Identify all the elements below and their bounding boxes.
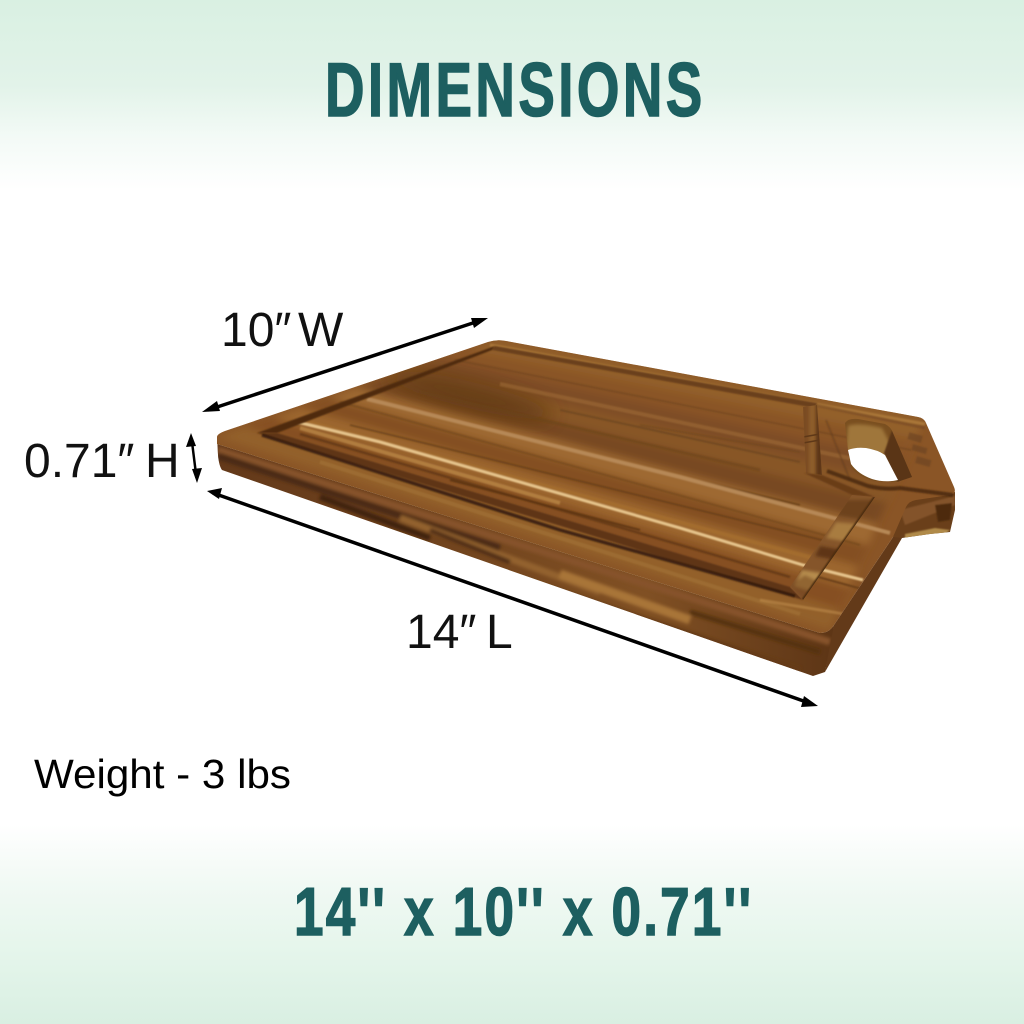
handle dark band [827, 471, 953, 495]
handle opening [845, 419, 912, 482]
label: width: 10″ [221, 304, 291, 357]
arrow: length [207, 488, 818, 707]
board right side face [825, 507, 906, 672]
board front side face [210, 430, 840, 680]
arrow: width [202, 318, 488, 412]
label: width: W [298, 304, 344, 357]
title: DIMENSIONS [325, 48, 702, 133]
groove handle-side segment [790, 495, 875, 600]
groove right segment [803, 405, 822, 475]
label: height: H [145, 435, 180, 488]
dimensions summary: 14'' x 10'' x 0.71'' [294, 874, 751, 949]
cutting board [210, 330, 970, 680]
engraved logo [907, 432, 932, 467]
juice groove [257, 346, 880, 605]
label: height: 0.71″ [24, 435, 134, 488]
label: length: 14″ [406, 606, 476, 659]
arrow: height [186, 433, 202, 483]
top background gradient [0, 0, 1024, 190]
handle side face [893, 492, 955, 538]
groove left segment [257, 346, 495, 433]
groove front segment [257, 433, 803, 600]
groove notch segment [804, 473, 875, 497]
groove back segment [492, 346, 817, 408]
label: length: L [486, 606, 513, 659]
board top surface [217, 340, 955, 633]
weight text: Weight - 3 lbs [34, 751, 291, 797]
see-through hole [848, 448, 898, 481]
bottom background gradient [0, 825, 1024, 1024]
